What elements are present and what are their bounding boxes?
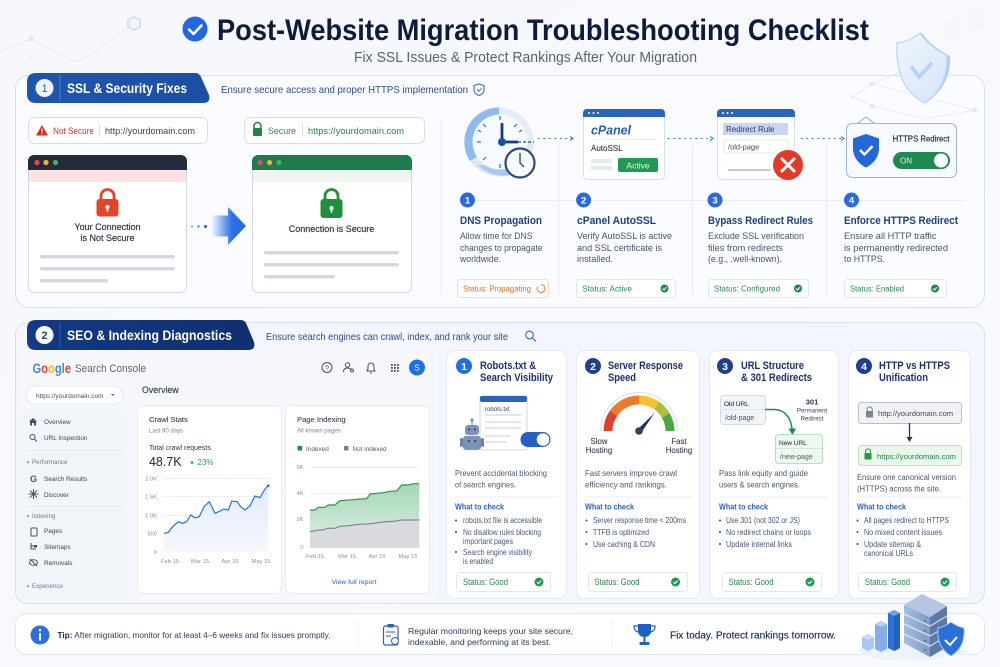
address bar: not secure [28, 118, 208, 144]
cPanel AutoSSL illustration: cPanel [591, 122, 631, 138]
step 2: cPanel AutoSSL: and SSL certificate is [577, 243, 662, 253]
redirect diagram: Old URL [724, 401, 749, 408]
card: URL Structure & 301 Redirects: URL Structure [741, 360, 804, 372]
card: Robots.txt & Search Visibility: robots.txt file is accessible [463, 516, 542, 525]
header icons: ? [325, 364, 329, 372]
line chart: crawl requests: 1.5K [145, 494, 157, 500]
gauge: slow to fast hosting: Slow [591, 437, 608, 446]
card: Page Indexing: All known pages [297, 428, 341, 434]
redirect diagram: Permanent [797, 408, 827, 414]
card: Server Response Speed: 2 [590, 361, 596, 373]
section banner [27, 320, 254, 350]
HTTP to HTTPS diagram: https://yourdomain.com [877, 452, 956, 461]
card: HTTP vs HTTPS Unification: HTTP vs HTTPS [879, 360, 950, 372]
bar: small [862, 634, 874, 651]
section description: Ensure search engines can crawl, index, and rank your site [266, 331, 508, 343]
status: good [722, 572, 822, 592]
step 3: bypass redirect rules: 3 [712, 196, 718, 206]
card: Server Response Speed: TTFB is optimized [593, 528, 649, 537]
card: Crawl Stats: Last 90 days [149, 428, 183, 434]
Google Search Console logo: Search Console [75, 363, 146, 375]
line chart: crawl requests: Mar 15 [191, 559, 209, 565]
sidebar navigation: Search Results [44, 476, 87, 483]
step 3: bypass redirect rules: files from redirects [708, 243, 783, 253]
Search Console dashboard [20, 350, 437, 600]
step 2: cPanel AutoSSL [576, 192, 676, 298]
HTTPS redirect toggle card: ON [900, 156, 912, 166]
card: URL Structure & 301 Redirects: Update internal links [726, 540, 792, 549]
sidebar navigation: Discover [44, 492, 70, 499]
card: HTTP vs HTTPS Unification: What to check [857, 502, 906, 512]
cPanel AutoSSL illustration: Active [626, 160, 650, 170]
sidebar navigation: G [30, 474, 37, 484]
sidebar navigation: Performance [32, 459, 68, 466]
sidebar navigation: URL Inspection [44, 435, 88, 442]
monitoring message: Regular monitoring keeps your site secure, [408, 626, 573, 636]
card: Crawl Stats [138, 406, 282, 594]
step 2: cPanel AutoSSL: installed. [577, 254, 613, 264]
area chart: indexed pages [296, 465, 419, 560]
browser window: secure: Connection is Secure [289, 224, 374, 234]
cPanel AutoSSL illustration [583, 109, 665, 180]
redirect rule illustration: Redirect Rule [726, 125, 775, 134]
gauge: slow to fast hosting [586, 392, 692, 455]
card: Robots.txt & Search Visibility: What to check [455, 502, 504, 512]
address bar: secure: https://yourdomain.com [308, 126, 404, 137]
step 3: bypass redirect rules [708, 192, 813, 298]
status: good: Status: Good [728, 577, 774, 587]
card: Page Indexing [286, 406, 430, 594]
HTTP to HTTPS diagram: http://yourdomain.com [878, 409, 953, 418]
robots.txt illustration: robots.txt [485, 407, 510, 413]
card: Crawl Stats: Crawl Stats [149, 415, 188, 424]
step 2: cPanel AutoSSL: 2 [581, 196, 586, 206]
redirect diagram: Redirect [800, 416, 824, 422]
sidebar navigation: Overview [44, 419, 71, 426]
browser window: not secure: Your Connection [74, 222, 141, 232]
line chart: crawl requests: 1.0K [145, 514, 157, 520]
card: Robots.txt & Search Visibility: 1 [461, 361, 467, 373]
card: HTTP vs HTTPS Unification: Unification [879, 372, 928, 384]
address bar: not secure: Not Secure [53, 126, 94, 136]
arrow: not secure to secure [191, 207, 246, 245]
card: URL Structure & 301 Redirects: & 301 Redirects [741, 372, 812, 384]
status: good [588, 572, 688, 592]
panel: SEO & Indexing Diagnostics [16, 320, 984, 604]
card: HTTP vs HTTPS Unification: 4 [861, 361, 867, 373]
line chart: crawl requests: Feb 15 [161, 559, 179, 565]
step 4: enforce HTTPS redirect: is permanently redirected [844, 243, 948, 253]
icon: title check badge [182, 16, 208, 42]
section banner: 2 [41, 330, 48, 342]
closing message [634, 624, 836, 645]
section banner: SSL & Security Fixes [67, 81, 187, 96]
status: configured: Status: Configured [714, 284, 780, 294]
status: good [858, 572, 956, 592]
icon: red X [773, 150, 803, 180]
card: HTTP vs HTTPS Unification: (HTTPS) across the site. [857, 484, 941, 494]
robots.txt illustration [460, 396, 550, 450]
card: Robots.txt & Search Visibility: Prevent accidental blocking [455, 468, 547, 478]
gauge: slow to fast hosting: Hosting [586, 446, 612, 455]
overview heading: Overview [142, 385, 179, 395]
card: URL Structure & 301 Redirects: No redirect chains or loops [726, 528, 811, 537]
step 1: DNS propagation: 1 [465, 196, 471, 206]
card: Page Indexing: Page Indexing [297, 415, 346, 424]
HTTPS redirect toggle card [846, 117, 956, 178]
card: URL Structure & 301 Redirects [710, 350, 838, 598]
card: Server Response Speed [576, 350, 700, 598]
card: Crawl Stats: 48.7K [149, 454, 182, 469]
section description: Ensure secure access and proper HTTPS implementation [221, 84, 468, 96]
monitoring message [384, 624, 573, 647]
card: URL Structure & 301 Redirects: Use 301 (not 302 or JS) [726, 516, 800, 525]
card: HTTP vs HTTPS Unification: All pages redirect to HTTPS [864, 516, 949, 525]
card: URL Structure & 301 Redirects: Pass link equity and guide [719, 468, 808, 478]
status: enabled: Status: Enabled [850, 284, 904, 294]
step 3: bypass redirect rules: (e.g., .well-known). [708, 254, 782, 264]
card: Crawl Stats: 23% [198, 458, 214, 467]
browser window: not secure: is Not Secure [80, 233, 135, 243]
card: URL Structure & 301 Redirects: What to check [719, 502, 768, 512]
card: URL Structure & 301 Redirects: users & search engines. [719, 480, 800, 490]
card: Robots.txt & Search Visibility: Robots.txt & [480, 360, 536, 372]
card: Robots.txt & Search Visibility: Search Visibility [480, 372, 554, 384]
cPanel AutoSSL illustration: AutoSSL [591, 144, 623, 153]
card: Crawl Stats: Total crawl requests [149, 445, 211, 452]
card: Robots.txt & Search Visibility: of search engines. [455, 480, 516, 490]
line chart: crawl requests: 2.0K [145, 476, 157, 482]
step 4: enforce HTTPS redirect: 4 [849, 196, 855, 206]
address bar: not secure: http://yourdomain.com [105, 126, 195, 137]
step 4: enforce HTTPS redirect: Ensure all HTTP traffic [844, 231, 937, 241]
sidebar navigation: Sitemaps [44, 544, 71, 551]
HTTPS redirect toggle card: HTTPS Redirect [893, 134, 950, 144]
line chart: crawl requests: 500 [147, 532, 157, 538]
area chart: indexed pages: 0 [300, 545, 304, 551]
browser window: not secure [28, 155, 187, 292]
status: good: Status: Good [463, 577, 508, 587]
redirect diagram: /new-page [780, 454, 813, 461]
line chart: crawl requests [145, 476, 271, 565]
card: HTTP vs HTTPS Unification: Ensure one canonical version [857, 472, 956, 482]
card: HTTP vs HTTPS Unification: canonical URLs [864, 549, 913, 558]
section banner: 1 [41, 83, 48, 95]
chart legend [298, 446, 387, 453]
icon: red padlock [96, 190, 118, 216]
subtitle: Fix SSL Issues & Protect Rankings After Your Migration [354, 50, 697, 66]
header icons: S [414, 364, 420, 372]
icon: robot [460, 418, 484, 450]
tip [30, 626, 330, 644]
icon: toggle [520, 432, 550, 447]
card: HTTP vs HTTPS Unification [848, 350, 970, 598]
icon: green padlock [320, 190, 342, 218]
header icons [322, 360, 425, 376]
step 1: DNS propagation: worldwide. [459, 254, 501, 264]
card: HTTP vs HTTPS Unification: Update sitemap & [864, 540, 922, 549]
step 1: DNS propagation: Allow time for DNS [460, 231, 532, 241]
tip: Tip: After migration, monitor for at least 4–6 weeks and fix issues promptly. [58, 630, 330, 640]
sidebar navigation: Pages [44, 528, 62, 535]
area chart: indexed pages: 6K [296, 465, 304, 471]
property selector: https://yourdomain.com [36, 393, 104, 400]
redirect diagram: New URL [779, 440, 807, 447]
shield badge [938, 622, 964, 656]
address bar: secure [244, 118, 424, 144]
line chart: crawl requests: May 15 [251, 559, 271, 565]
card: Server Response Speed: Use caching & CDN [593, 540, 655, 549]
step 1: DNS propagation [458, 192, 548, 298]
card: URL Structure & 301 Redirects: 3 [722, 361, 728, 373]
card: Server Response Speed: Server response time < 200ms [593, 516, 686, 525]
address bar: secure: Secure [268, 126, 296, 136]
section banner: SEO & Indexing Diagnostics [67, 328, 232, 343]
card: Robots.txt & Search Visibility: important pages [463, 537, 513, 546]
chart legend: Indexed [306, 446, 329, 453]
icon: clock [464, 107, 534, 178]
HTTP to HTTPS diagram [858, 402, 962, 466]
step 1: DNS propagation: changes to propagate [460, 243, 542, 253]
gauge: slow to fast hosting: Fast [671, 437, 687, 446]
card: Robots.txt & Search Visibility: No disallow rules blocking [463, 528, 541, 537]
redirect diagram [720, 396, 827, 464]
Google Search Console logo: Google [32, 360, 71, 376]
sidebar navigation: Indexing [32, 513, 56, 520]
step 3: bypass redirect rules: Bypass Redirect Rules [708, 215, 813, 227]
server stack [904, 594, 947, 657]
sidebar navigation: Removals [44, 560, 72, 567]
heading: Post-Website Migration Troubleshooting Checklist [217, 14, 869, 47]
closing message: Fix today. Protect rankings tomorrow. [670, 630, 836, 642]
server and analytics illustration [855, 594, 970, 661]
arrow: dotted 1 to 2 [538, 136, 573, 140]
redirect rule illustration: /old-page [728, 142, 759, 152]
Google Search Console logo [32, 360, 146, 376]
panel: SSL & Security Fixes [16, 33, 984, 308]
status: active: Status: Active [582, 284, 633, 294]
card: Server Response Speed: Server Response [608, 360, 683, 372]
redirect diagram: 301 [806, 398, 818, 406]
area chart: indexed pages: Mar 15 [338, 554, 356, 560]
step 2: cPanel AutoSSL: cPanel AutoSSL [577, 215, 656, 227]
area chart: indexed pages: 2K [296, 517, 304, 523]
property selector [26, 386, 123, 404]
card: Robots.txt & Search Visibility: Search engine visibility [463, 548, 532, 557]
arrow: dotted 3 to 4 [801, 136, 844, 140]
sidebar navigation: Experience [32, 583, 64, 590]
redirect diagram: /old-page [725, 415, 754, 422]
bar: tall [888, 610, 900, 651]
monitoring message: indexable, and performing at its best. [408, 637, 551, 647]
bar: medium [875, 621, 887, 652]
step 1: DNS propagation: DNS Propagation [460, 215, 542, 227]
card: Server Response Speed: efficiency and rankings. [585, 480, 667, 490]
browser window: secure [252, 155, 412, 292]
card: Server Response Speed: What to check [585, 502, 634, 512]
card: Robots.txt & Search Visibility: is enabled [463, 557, 493, 566]
area chart: indexed pages: May 15 [398, 554, 418, 560]
card: HTTP vs HTTPS Unification: No mixed content issues [864, 528, 942, 537]
area chart: indexed pages: Apr 15 [368, 554, 386, 560]
area chart: indexed pages: Feb 15 [306, 554, 324, 560]
decorative shield illustration [852, 33, 977, 119]
link: view full report: View full report [332, 579, 377, 586]
card: Server Response Speed: Fast servers improve crawl [585, 468, 677, 478]
card: Server Response Speed: Speed [608, 372, 636, 384]
title [182, 14, 869, 47]
redirect rule illustration [717, 109, 803, 180]
footer tip bar [16, 594, 984, 661]
step 2: cPanel AutoSSL: Verify AutoSSL is active [577, 231, 672, 241]
sidebar navigation [26, 418, 122, 590]
status: good: Status: Good [594, 577, 640, 587]
section banner [27, 73, 209, 103]
gauge: slow to fast hosting: Hosting [666, 446, 692, 455]
step 4: enforce HTTPS redirect: Enforce HTTPS Redirect [844, 215, 958, 227]
status: good [456, 572, 550, 592]
status: propagating: Status: Propagating [463, 284, 531, 294]
line chart: crawl requests: Apr 15 [221, 559, 239, 565]
status: good: Status: Good [865, 577, 910, 587]
step 4: enforce HTTPS redirect [844, 192, 958, 298]
line chart: crawl requests: 0 [154, 550, 157, 556]
step 4: enforce HTTPS redirect: to HTTPS. [844, 254, 885, 264]
area chart: indexed pages: 4K [296, 491, 304, 497]
chart legend: Not indexed [352, 446, 387, 453]
card: Robots.txt & Search Visibility [446, 350, 566, 598]
arrow: dotted 2 to 3 [668, 136, 713, 140]
step 3: bypass redirect rules: Exclude SSL verification [708, 231, 804, 241]
